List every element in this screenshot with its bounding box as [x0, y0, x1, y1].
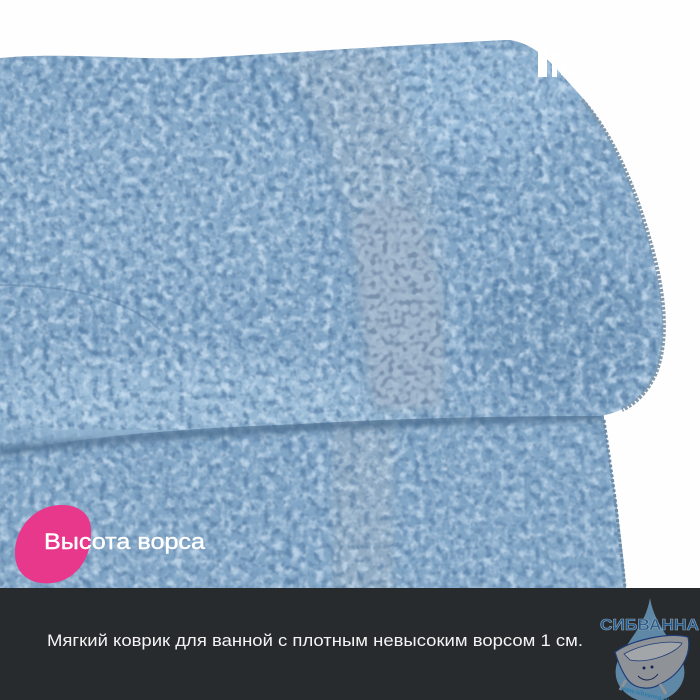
photo: lower mat stitched edge: [604, 420, 625, 588]
badge heading: Высота ворса: [44, 529, 206, 554]
caption text: Мягкий коврик для ванной с плотным невысоким ворсом 1 см.: [47, 632, 583, 650]
photo: woven band weave: [354, 196, 446, 410]
photo: pile band across the roll: [292, 48, 447, 337]
badge: pink blob: [15, 505, 91, 583]
photo: rolled bath mat: [0, 30, 680, 440]
photo: roll stitched edge: [582, 100, 664, 410]
logo: Сибванна: [600, 598, 699, 700]
photo: lower layer of the bath mat: [0, 415, 626, 588]
logo wordmark: СИБВАННА: [600, 617, 699, 634]
caption bar: [0, 588, 700, 700]
logo tub: [615, 635, 689, 694]
logo drop: [616, 598, 684, 700]
white watermark fragment: [538, 47, 575, 77]
